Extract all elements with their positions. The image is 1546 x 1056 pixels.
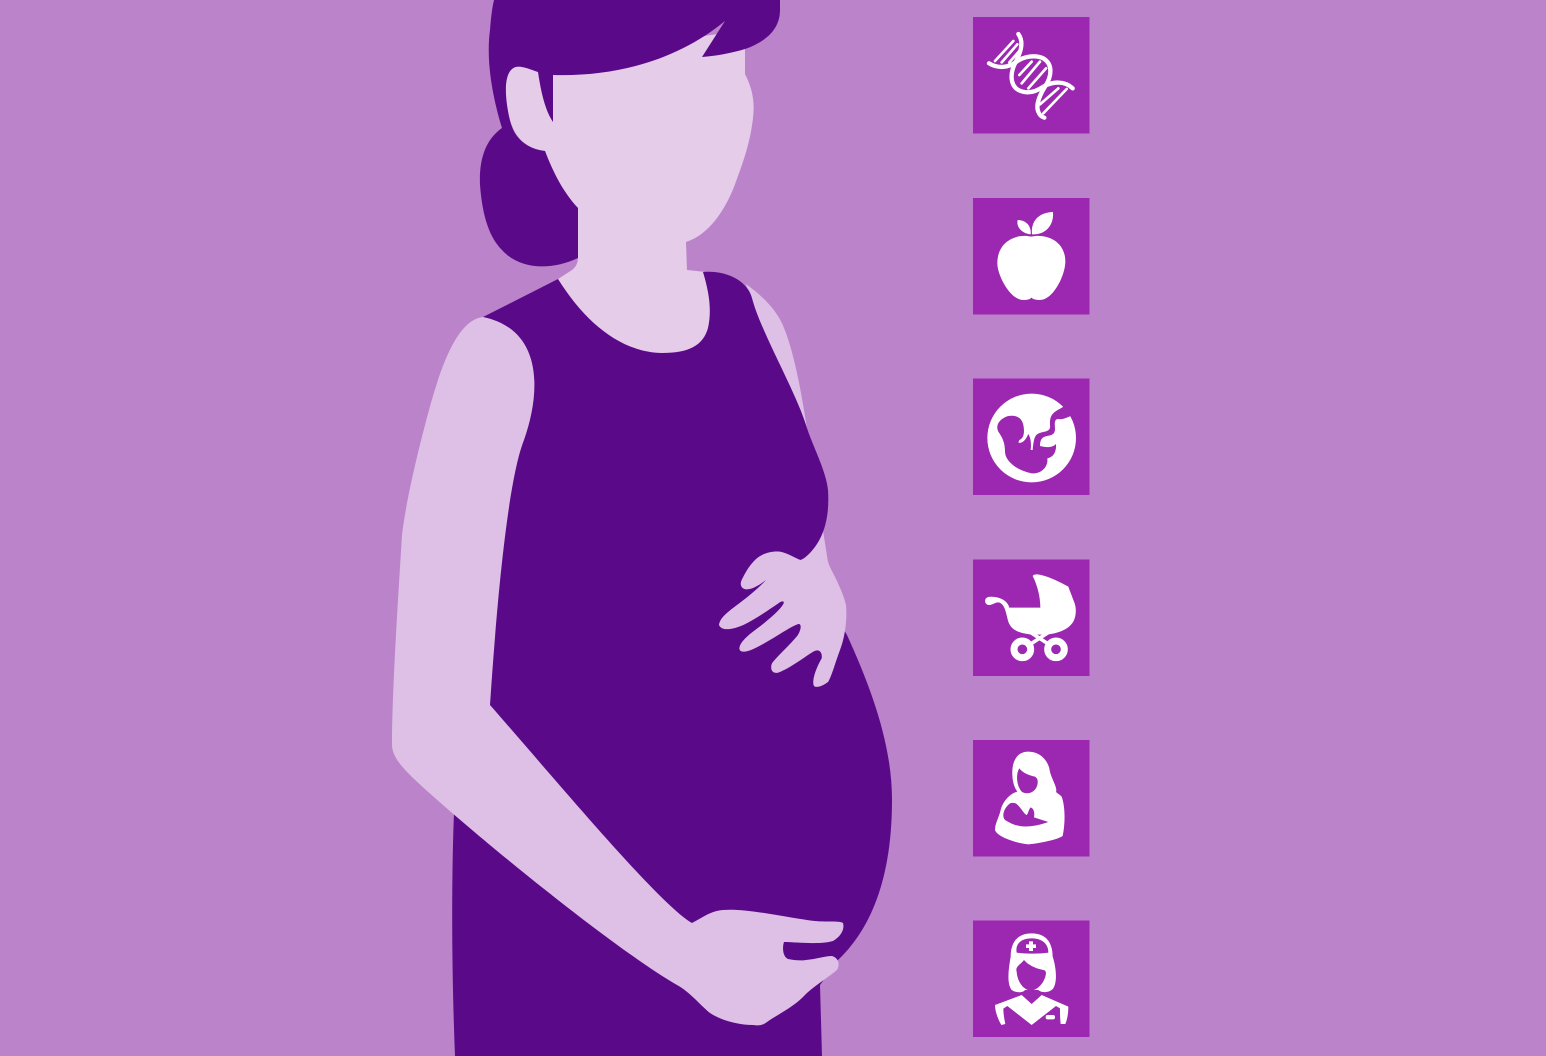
hair bun [480, 110, 578, 266]
dress [452, 272, 892, 1056]
icon: mother and baby [995, 752, 1065, 844]
icon tile: nurse [973, 920, 1090, 1037]
back arm [746, 284, 830, 575]
front arm and lower hand [392, 317, 843, 1025]
hair [489, 0, 780, 135]
upper hand on belly [719, 541, 846, 687]
icon: apple [997, 212, 1065, 300]
icon: DNA helix [989, 34, 1073, 118]
icon: stroller [985, 574, 1076, 658]
icon tile: baby stroller [973, 560, 1090, 676]
illustration: pregnant woman [392, 0, 892, 1056]
icon tile: DNA [973, 17, 1090, 134]
icon: nurse [995, 933, 1068, 1025]
icon tile: fetus [973, 378, 1090, 495]
icon tile: breastfeeding mother [973, 740, 1090, 856]
icon: fetus in womb [987, 394, 1076, 482]
icon tile: apple [973, 198, 1090, 314]
head and neck [506, 30, 754, 370]
